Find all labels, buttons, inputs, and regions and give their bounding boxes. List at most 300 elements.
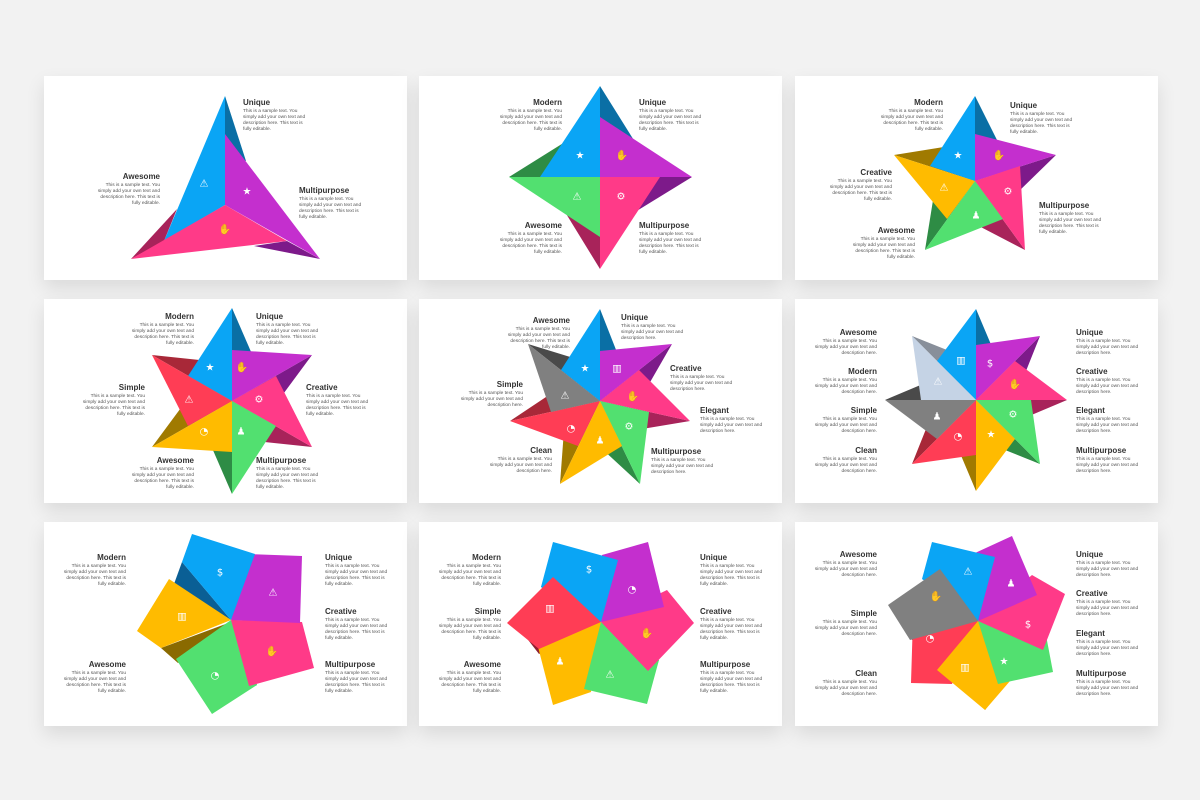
- text: Awesome: fully editable.: [132, 201, 160, 206]
- text: Unique: [1076, 328, 1138, 356]
- chart: 8-point star: ✋: [1009, 378, 1021, 390]
- chart: 7-point star: [510, 309, 690, 484]
- text: Unique: fully editable.: [256, 341, 284, 346]
- chart: 5-piece pinwheel: ◔: [211, 670, 219, 682]
- chart: 7-point star: ♟: [596, 436, 604, 446]
- text: Unique: This is a sample text. You: [243, 109, 297, 114]
- text: Creative: This is a sample text. You: [700, 618, 754, 623]
- text: Modern: Modern: [533, 98, 562, 107]
- text: Unique: description here. This text is: [639, 121, 699, 126]
- text: Unique: This is a sample text. You: [700, 564, 754, 569]
- text: Awesome: This is a sample text. You: [72, 671, 126, 676]
- slide 2: 4-point star: [419, 76, 782, 280]
- text: Creative: fully editable.: [864, 197, 892, 202]
- text: Unique: simply add your own text and: [639, 115, 701, 120]
- text: Awesome: This is a sample text. You: [516, 327, 570, 332]
- text: Awesome: fully editable.: [473, 689, 501, 694]
- text: Multipurpose: simply add your own text and: [1076, 463, 1138, 468]
- chart: 6-point star: ◔: [200, 426, 208, 438]
- text: Unique: [325, 553, 395, 588]
- slide 9: 7-piece pinwheel: [795, 522, 1158, 726]
- chart: 8-point star: $: [987, 358, 993, 370]
- chart: 4-point star: ⚠: [573, 192, 582, 202]
- text: Creative: [306, 383, 368, 417]
- text: Multipurpose: fully editable.: [299, 215, 327, 220]
- slide 5: 7-point star: [419, 299, 782, 503]
- text: Awesome: [815, 328, 877, 356]
- text: Creative: fully editable.: [306, 412, 334, 417]
- chart: triangle star: ★: [243, 186, 252, 198]
- text: Clean: simply add your own text and: [815, 463, 877, 468]
- text: Multipurpose: Multipurpose: [256, 456, 306, 465]
- text: Awesome: description here. This text is: [502, 244, 562, 249]
- chart: 8-point star: ▥: [956, 356, 966, 366]
- text: Clean: Clean: [530, 446, 552, 455]
- text: Creative: [1076, 589, 1146, 618]
- text: Awesome: Awesome: [840, 328, 877, 337]
- text: Elegant: [1076, 406, 1138, 434]
- text: Unique: [1076, 550, 1146, 579]
- chart: 7-piece pinwheel: ▥: [960, 662, 970, 674]
- chart: 5-point star: [894, 96, 1056, 250]
- text: Multipurpose: description here. This text is: [256, 479, 316, 484]
- chart: 5-piece pinwheel: [137, 534, 314, 714]
- text: Awesome: description here. This text is: [855, 249, 915, 254]
- text: Unique: description here. This text is: [700, 576, 760, 581]
- text: Awesome: This is a sample text. You: [106, 183, 160, 188]
- text: Modern: simply add your own text and: [815, 384, 877, 389]
- text: Modern: fully editable.: [915, 127, 943, 132]
- text: Multipurpose: simply add your own text and: [325, 677, 387, 682]
- chart: 7-piece pinwheel: $: [1025, 620, 1031, 630]
- text: Awesome: This is a sample text. You: [140, 467, 194, 472]
- text: Multipurpose: [256, 456, 318, 490]
- text: Simple: Simple: [497, 380, 523, 389]
- text: Modern: fully editable.: [98, 582, 126, 587]
- text: Awesome: This is a sample text. You: [823, 339, 877, 344]
- text: Simple: This is a sample text. You: [469, 391, 523, 396]
- text: Multipurpose: [325, 660, 395, 695]
- text: Multipurpose: [651, 447, 713, 475]
- text: Unique: [243, 98, 305, 132]
- chart: 6-piece pinwheel: ✋: [641, 626, 653, 640]
- text: Multipurpose: fully editable.: [325, 689, 353, 694]
- text: Unique: Unique: [700, 553, 727, 562]
- text: Simple: [461, 380, 523, 408]
- text: Awesome: fully editable.: [534, 250, 562, 255]
- text: Simple: Simple: [851, 609, 877, 618]
- text: Modern: [132, 312, 194, 346]
- text: Modern: Modern: [914, 98, 943, 107]
- text: Creative: This is a sample text. You: [325, 618, 379, 623]
- text: Elegant: This is a sample text. You: [1076, 417, 1130, 422]
- text: Unique: This is a sample text. You: [256, 323, 310, 328]
- text: Multipurpose: description here.: [651, 470, 686, 475]
- text: Unique: [639, 98, 701, 132]
- chart: 7-point star: ◔: [567, 424, 575, 434]
- text: Simple: simply add your own text and: [815, 626, 877, 631]
- text: Creative: simply add your own text and: [670, 381, 732, 386]
- text: Creative: This is a sample text. You: [670, 375, 724, 380]
- text: Awesome: Awesome: [525, 221, 562, 230]
- text: Multipurpose: This is a sample text. You: [1039, 212, 1093, 217]
- text: Unique: simply add your own text and: [1010, 118, 1072, 123]
- text: Modern: [56, 553, 126, 588]
- text: Clean: This is a sample text. You: [823, 680, 877, 685]
- text: Modern: [500, 98, 562, 132]
- text: Modern: simply add your own text and: [132, 329, 194, 334]
- text: Multipurpose: [1076, 446, 1138, 474]
- text: Unique: description here. This text is: [243, 121, 303, 126]
- text: Modern: fully editable.: [534, 127, 562, 132]
- text: Unique: This is a sample text. You: [1076, 561, 1130, 566]
- text: Creative: description here.: [670, 387, 705, 392]
- text: Unique: Unique: [1076, 550, 1103, 559]
- chart: 5-point star: ⚠: [940, 182, 949, 194]
- text: Simple: Simple: [851, 406, 877, 415]
- text: Modern: simply add your own text and: [500, 115, 562, 120]
- text: Creative: description here.: [1076, 612, 1111, 617]
- text: Simple: simply add your own text and: [439, 624, 501, 629]
- text: Modern: This is a sample text. You: [447, 564, 501, 569]
- slide 8: 6-piece pinwheel: [419, 522, 782, 726]
- text: Creative: description here. This text is: [832, 191, 892, 196]
- chart: 7-piece pinwheel: ⚠: [964, 566, 973, 578]
- text: Awesome: This is a sample text. You: [861, 237, 915, 242]
- text: Creative: [700, 607, 770, 642]
- text: Multipurpose: [299, 186, 361, 220]
- text: Unique: This is a sample text. You: [1010, 112, 1064, 117]
- slide 6: 8-point star: [795, 299, 1158, 503]
- text: Modern: Modern: [472, 553, 501, 562]
- text: Multipurpose: simply add your own text and: [1039, 218, 1101, 223]
- text: Unique: This is a sample text. You: [1076, 339, 1130, 344]
- text: Creative: This is a sample text. You: [1076, 600, 1130, 605]
- text: Simple: description here. This text is: [441, 630, 501, 635]
- chart: 5-piece pinwheel: ▥: [177, 612, 187, 622]
- text: Modern: description here. This text is: [502, 121, 562, 126]
- text: Elegant: [1076, 629, 1146, 658]
- chart: 6-piece pinwheel: $: [586, 564, 592, 576]
- text: Awesome: simply add your own text and: [815, 567, 877, 572]
- text: Modern: fully editable.: [166, 341, 194, 346]
- text: Simple: fully editable.: [473, 636, 501, 641]
- text: Unique: description here.: [1076, 351, 1111, 356]
- chart: 6-point star: ✋: [236, 360, 248, 374]
- chart: 7-piece pinwheel: ♟: [1007, 578, 1015, 590]
- text: Multipurpose: Multipurpose: [700, 660, 750, 669]
- text: Creative: simply add your own text and: [700, 624, 762, 629]
- text: Modern: description here. This text is: [441, 576, 501, 581]
- chart: 5-piece pinwheel: $: [217, 568, 223, 578]
- chart: triangle star: ✋: [219, 222, 231, 236]
- text: Unique: This is a sample text. You: [325, 564, 379, 569]
- text: Modern: simply add your own text and: [881, 115, 943, 120]
- text: Elegant: This is a sample text. You: [700, 417, 754, 422]
- text: Unique: description here.: [621, 336, 656, 341]
- text: Multipurpose: simply add your own text and: [651, 464, 713, 469]
- text: Multipurpose: [1076, 669, 1146, 698]
- chart: triangle star: [131, 96, 320, 259]
- chart: 4-point star: ✋: [616, 148, 628, 162]
- text: Multipurpose: This is a sample text. You: [700, 671, 754, 676]
- text: Simple: description here. This text is: [85, 406, 145, 411]
- text: Awesome: description here. This text is: [134, 479, 194, 484]
- text: Multipurpose: Multipurpose: [1076, 669, 1126, 678]
- text: Multipurpose: This is a sample text. You: [299, 197, 353, 202]
- text: Clean: Clean: [855, 669, 877, 678]
- chart: 7-point star: ⚠: [561, 390, 570, 402]
- text: Unique: Unique: [256, 312, 283, 321]
- chart: 6-point star: [152, 308, 312, 494]
- text: Clean: Clean: [855, 446, 877, 455]
- text: Elegant: simply add your own text and: [700, 423, 762, 428]
- chart: 8-point star: ⚙: [1009, 410, 1017, 420]
- text: Awesome: description here. This text is: [510, 339, 570, 344]
- text: Awesome: [56, 660, 126, 695]
- text: Simple: description here.: [488, 403, 523, 408]
- text: Unique: simply add your own text and: [243, 115, 305, 120]
- text: Multipurpose: [1039, 201, 1101, 235]
- chart: 7-point star: ✋: [627, 390, 639, 402]
- text: Modern: description here. This text is: [134, 335, 194, 340]
- text: Unique: description here. This text is: [325, 576, 385, 581]
- chart: 4-point star: ★: [576, 150, 585, 162]
- text: Multipurpose: Multipurpose: [299, 186, 349, 195]
- text: Awesome: This is a sample text. You: [447, 671, 501, 676]
- text: Creative: description here. This text is: [700, 630, 760, 635]
- chart: 5-piece pinwheel: ✋: [266, 644, 278, 658]
- text: Simple: simply add your own text and: [83, 400, 145, 405]
- chart: 7-piece pinwheel: ◔: [926, 634, 934, 644]
- text: Unique: [1010, 101, 1072, 135]
- text: Creative: description here. This text is: [306, 406, 366, 411]
- text: Multipurpose: Multipurpose: [1076, 446, 1126, 455]
- chart: 8-point star: [885, 309, 1067, 491]
- text: Multipurpose: simply add your own text and: [256, 473, 318, 478]
- text: Modern: [881, 98, 943, 132]
- text: Awesome: This is a sample text. You: [823, 561, 877, 566]
- text: Unique: [256, 312, 318, 346]
- text: Multipurpose: Multipurpose: [651, 447, 701, 456]
- text: Modern: This is a sample text. You: [140, 323, 194, 328]
- text: Modern: description here. This text is: [883, 121, 943, 126]
- text: Simple: [83, 383, 145, 417]
- text: Modern: description here.: [842, 390, 877, 395]
- text: Multipurpose: simply add your own text and: [1076, 686, 1138, 691]
- chart: triangle star: ⚠: [200, 178, 209, 190]
- text: Clean: description here.: [842, 469, 877, 474]
- text: Creative: [670, 364, 732, 392]
- chart: 8-point star: ⚠: [934, 376, 943, 388]
- text: Modern: This is a sample text. You: [823, 378, 877, 383]
- text: Creative: [325, 607, 395, 642]
- text: Multipurpose: Multipurpose: [1039, 201, 1089, 210]
- text: Elegant: simply add your own text and: [1076, 423, 1138, 428]
- text: Unique: Unique: [1010, 101, 1037, 110]
- text: Multipurpose: This is a sample text. You: [1076, 457, 1130, 462]
- text: Clean: description here.: [842, 692, 877, 697]
- text: Multipurpose: [700, 660, 770, 695]
- text: Unique: description here.: [1076, 573, 1111, 578]
- text: Multipurpose: description here.: [1076, 469, 1111, 474]
- text: Modern: description here. This text is: [66, 576, 126, 581]
- slide 3: 5-point star: [795, 76, 1158, 280]
- chart: 6-point star: ⚙: [255, 394, 263, 406]
- text: Creative: simply add your own text and: [1076, 384, 1138, 389]
- chart: 4-point star: [509, 86, 692, 269]
- chart: 6-point star: ★: [206, 362, 215, 374]
- text: Awesome: description here. This text is: [66, 683, 126, 688]
- text: Awesome: fully editable.: [887, 255, 915, 260]
- text: Unique: description here. This text is: [256, 335, 316, 340]
- chart: 5-piece pinwheel: ⚠: [269, 588, 278, 598]
- text: Modern: [431, 553, 501, 588]
- text: Multipurpose: simply add your own text and: [700, 677, 762, 682]
- text: Modern: simply add your own text and: [439, 570, 501, 575]
- slide 7: 5-piece pinwheel: [44, 522, 407, 726]
- text: Awesome: fully editable.: [166, 485, 194, 490]
- text: Unique: fully editable.: [639, 127, 667, 132]
- text: Simple: This is a sample text. You: [447, 618, 501, 623]
- text: Clean: [815, 446, 877, 474]
- text: Multipurpose: description here. This text is: [325, 683, 385, 688]
- text: Awesome: description here.: [842, 351, 877, 356]
- text: Unique: fully editable.: [243, 127, 271, 132]
- text: Simple: [815, 406, 877, 434]
- text: Awesome: simply add your own text and: [508, 333, 570, 338]
- text: Creative: Creative: [1076, 589, 1108, 598]
- chart: 5-point star: ⚙: [1004, 186, 1012, 198]
- text: Elegant: Elegant: [700, 406, 729, 415]
- chart: 8-point star: ♟: [933, 412, 941, 422]
- text: Multipurpose: This is a sample text. You: [256, 467, 310, 472]
- text: Creative: This is a sample text. You: [838, 179, 892, 184]
- text: Modern: This is a sample text. You: [889, 109, 943, 114]
- chart: 5-point star: ✋: [993, 148, 1005, 162]
- slide 4: 6-point star: [44, 299, 407, 503]
- text: Elegant: description here.: [1076, 429, 1111, 434]
- text: Awesome: Awesome: [464, 660, 501, 669]
- text: Unique: simply add your own text and: [325, 570, 387, 575]
- text: Multipurpose: description here. This text is: [639, 244, 699, 249]
- text: Multipurpose: [639, 221, 701, 255]
- text: Awesome: fully editable.: [542, 345, 570, 350]
- text: Awesome: [132, 456, 194, 490]
- text: Clean: simply add your own text and: [490, 463, 552, 468]
- text: Clean: [490, 446, 552, 474]
- text: Awesome: Awesome: [878, 226, 915, 235]
- text: Creative: [1076, 367, 1138, 395]
- text: Creative: Creative: [325, 607, 357, 616]
- text: Multipurpose: Multipurpose: [325, 660, 375, 669]
- text: Multipurpose: fully editable.: [256, 485, 284, 490]
- text: Multipurpose: This is a sample text. You: [1076, 680, 1130, 685]
- text: Modern: This is a sample text. You: [508, 109, 562, 114]
- text: Simple: This is a sample text. You: [823, 620, 877, 625]
- text: Awesome: simply add your own text and: [64, 677, 126, 682]
- text: Multipurpose: simply add your own text and: [299, 203, 361, 208]
- text: Elegant: description here.: [1076, 652, 1111, 657]
- text: Creative: Creative: [306, 383, 338, 392]
- text: Clean: This is a sample text. You: [823, 457, 877, 462]
- text: Awesome: [508, 316, 570, 350]
- text: Awesome: This is a sample text. You: [508, 232, 562, 237]
- text: Unique: fully editable.: [700, 582, 728, 587]
- text: Simple: simply add your own text and: [815, 423, 877, 428]
- chart: 6-piece pinwheel: ◔: [628, 584, 636, 596]
- chart: 5-point star: ★: [954, 150, 963, 162]
- text: Awesome: Awesome: [533, 316, 570, 325]
- text: Awesome: simply add your own text and: [98, 189, 160, 194]
- text: Elegant: Elegant: [1076, 629, 1105, 638]
- chart: 8-point star: ◔: [954, 432, 962, 442]
- text: Multipurpose: fully editable.: [639, 250, 667, 255]
- text: Modern: Modern: [165, 312, 194, 321]
- text: Multipurpose: This is a sample text. You: [639, 232, 693, 237]
- chart: 6-point star: ⚠: [185, 394, 194, 406]
- text: Awesome: [98, 172, 160, 206]
- text: Awesome: simply add your own text and: [853, 243, 915, 248]
- slide 1: 3-point star: [44, 76, 407, 280]
- text: Creative: Creative: [670, 364, 702, 373]
- chart: 7-point star: ⚙: [625, 422, 633, 432]
- text: Unique: simply add your own text and: [700, 570, 762, 575]
- text: Creative: description here. This text is: [325, 630, 385, 635]
- text: Awesome: fully editable.: [98, 689, 126, 694]
- chart: 7-point star: ★: [581, 364, 590, 374]
- text: Awesome: Awesome: [840, 550, 877, 559]
- text: Unique: Unique: [639, 98, 666, 107]
- text: Elegant: description here.: [700, 429, 735, 434]
- text: Modern: Modern: [848, 367, 877, 376]
- text: Awesome: [853, 226, 915, 260]
- text: Simple: simply add your own text and: [461, 397, 523, 402]
- text: Unique: Unique: [1076, 328, 1103, 337]
- text: Creative: simply add your own text and: [306, 400, 368, 405]
- chart: 6-piece pinwheel: ▥: [545, 604, 555, 614]
- text: Modern: simply add your own text and: [64, 570, 126, 575]
- text: Awesome: Awesome: [89, 660, 126, 669]
- text: Unique: simply add your own text and: [1076, 345, 1138, 350]
- text: Creative: [830, 168, 892, 202]
- text: Awesome: description here. This text is: [100, 195, 160, 200]
- chart: 4-point star: ⚙: [617, 192, 625, 202]
- text: Multipurpose: simply add your own text and: [639, 238, 701, 243]
- text: Unique: fully editable.: [325, 582, 353, 587]
- text: Creative: This is a sample text. You: [306, 394, 360, 399]
- text: Multipurpose: description here. This text is: [700, 683, 760, 688]
- text: Unique: fully editable.: [1010, 130, 1038, 135]
- text: Simple: fully editable.: [117, 412, 145, 417]
- text: Unique: This is a sample text. You: [639, 109, 693, 114]
- text: Awesome: Awesome: [123, 172, 160, 181]
- text: Clean: [807, 669, 877, 698]
- chart: 7-piece pinwheel: [795, 522, 1158, 726]
- text: Simple: This is a sample text. You: [823, 417, 877, 422]
- text: Unique: simply add your own text and: [621, 330, 683, 335]
- text: Simple: This is a sample text. You: [91, 394, 145, 399]
- text: Elegant: This is a sample text. You: [1076, 640, 1130, 645]
- text: Unique: This is a sample text. You: [621, 324, 675, 329]
- text: Multipurpose: description here. This text is: [299, 209, 359, 214]
- text: Elegant: [700, 406, 762, 434]
- text: Multipurpose: This is a sample text. You: [651, 458, 705, 463]
- text: Multipurpose: description here.: [1076, 692, 1111, 697]
- text: Clean: simply add your own text and: [815, 686, 877, 691]
- text: Simple: description here.: [842, 429, 877, 434]
- text: Simple: Simple: [119, 383, 145, 392]
